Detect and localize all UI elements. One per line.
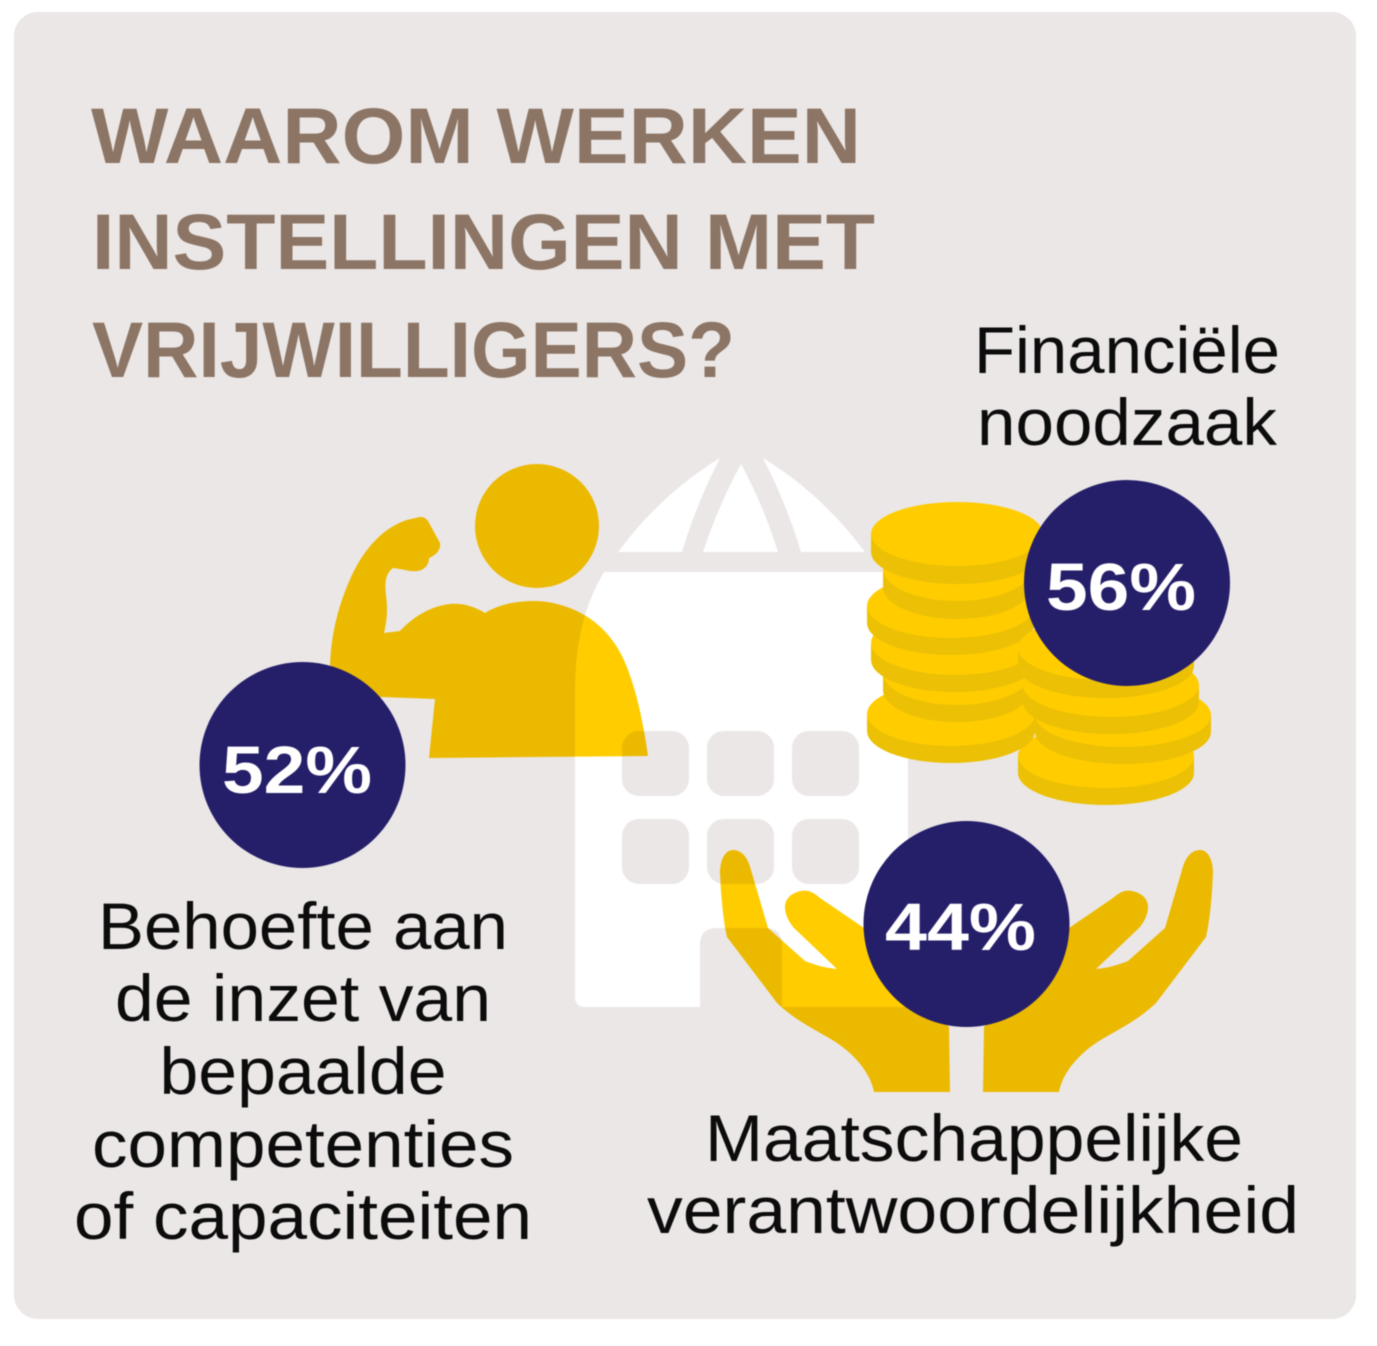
icon: caring hands: [720, 850, 1213, 1092]
badge: 56%: [1024, 480, 1230, 686]
label: financial necessity: noodzaak: [977, 385, 1278, 459]
label: social responsibility: Maatschappelijke: [705, 1101, 1243, 1175]
icon: flexing person: [330, 464, 648, 758]
badge: 52%: [200, 662, 406, 868]
badge: 52%: 52%: [222, 733, 372, 808]
label: need for competencies: of capaciteiten: [74, 1179, 532, 1253]
badge: 44%: [864, 821, 1070, 1027]
title: VRIJWILLIGERS?: [92, 305, 735, 394]
icon: institution building: [575, 458, 908, 1007]
icon: coin stacks: [867, 502, 1211, 805]
label: financial necessity: [974, 313, 1280, 459]
label: need for competencies: competenties: [92, 1107, 514, 1181]
label: social responsibility: [647, 1101, 1299, 1247]
label: need for competencies: de inzet van: [115, 961, 491, 1035]
label: need for competencies: [74, 889, 532, 1253]
title: [91, 91, 875, 394]
title: WAAROM WERKEN: [91, 91, 861, 180]
label: financial necessity: Financiële: [974, 313, 1280, 387]
label: need for competencies: bepaalde: [160, 1034, 446, 1108]
label: need for competencies: Behoefte aan: [98, 889, 508, 963]
badge: 44%: 44%: [885, 890, 1036, 965]
label: social responsibility: verantwoordelijkheid: [647, 1173, 1299, 1247]
badge: 56%: 56%: [1046, 550, 1196, 625]
title: INSTELLINGEN MET: [92, 197, 875, 286]
